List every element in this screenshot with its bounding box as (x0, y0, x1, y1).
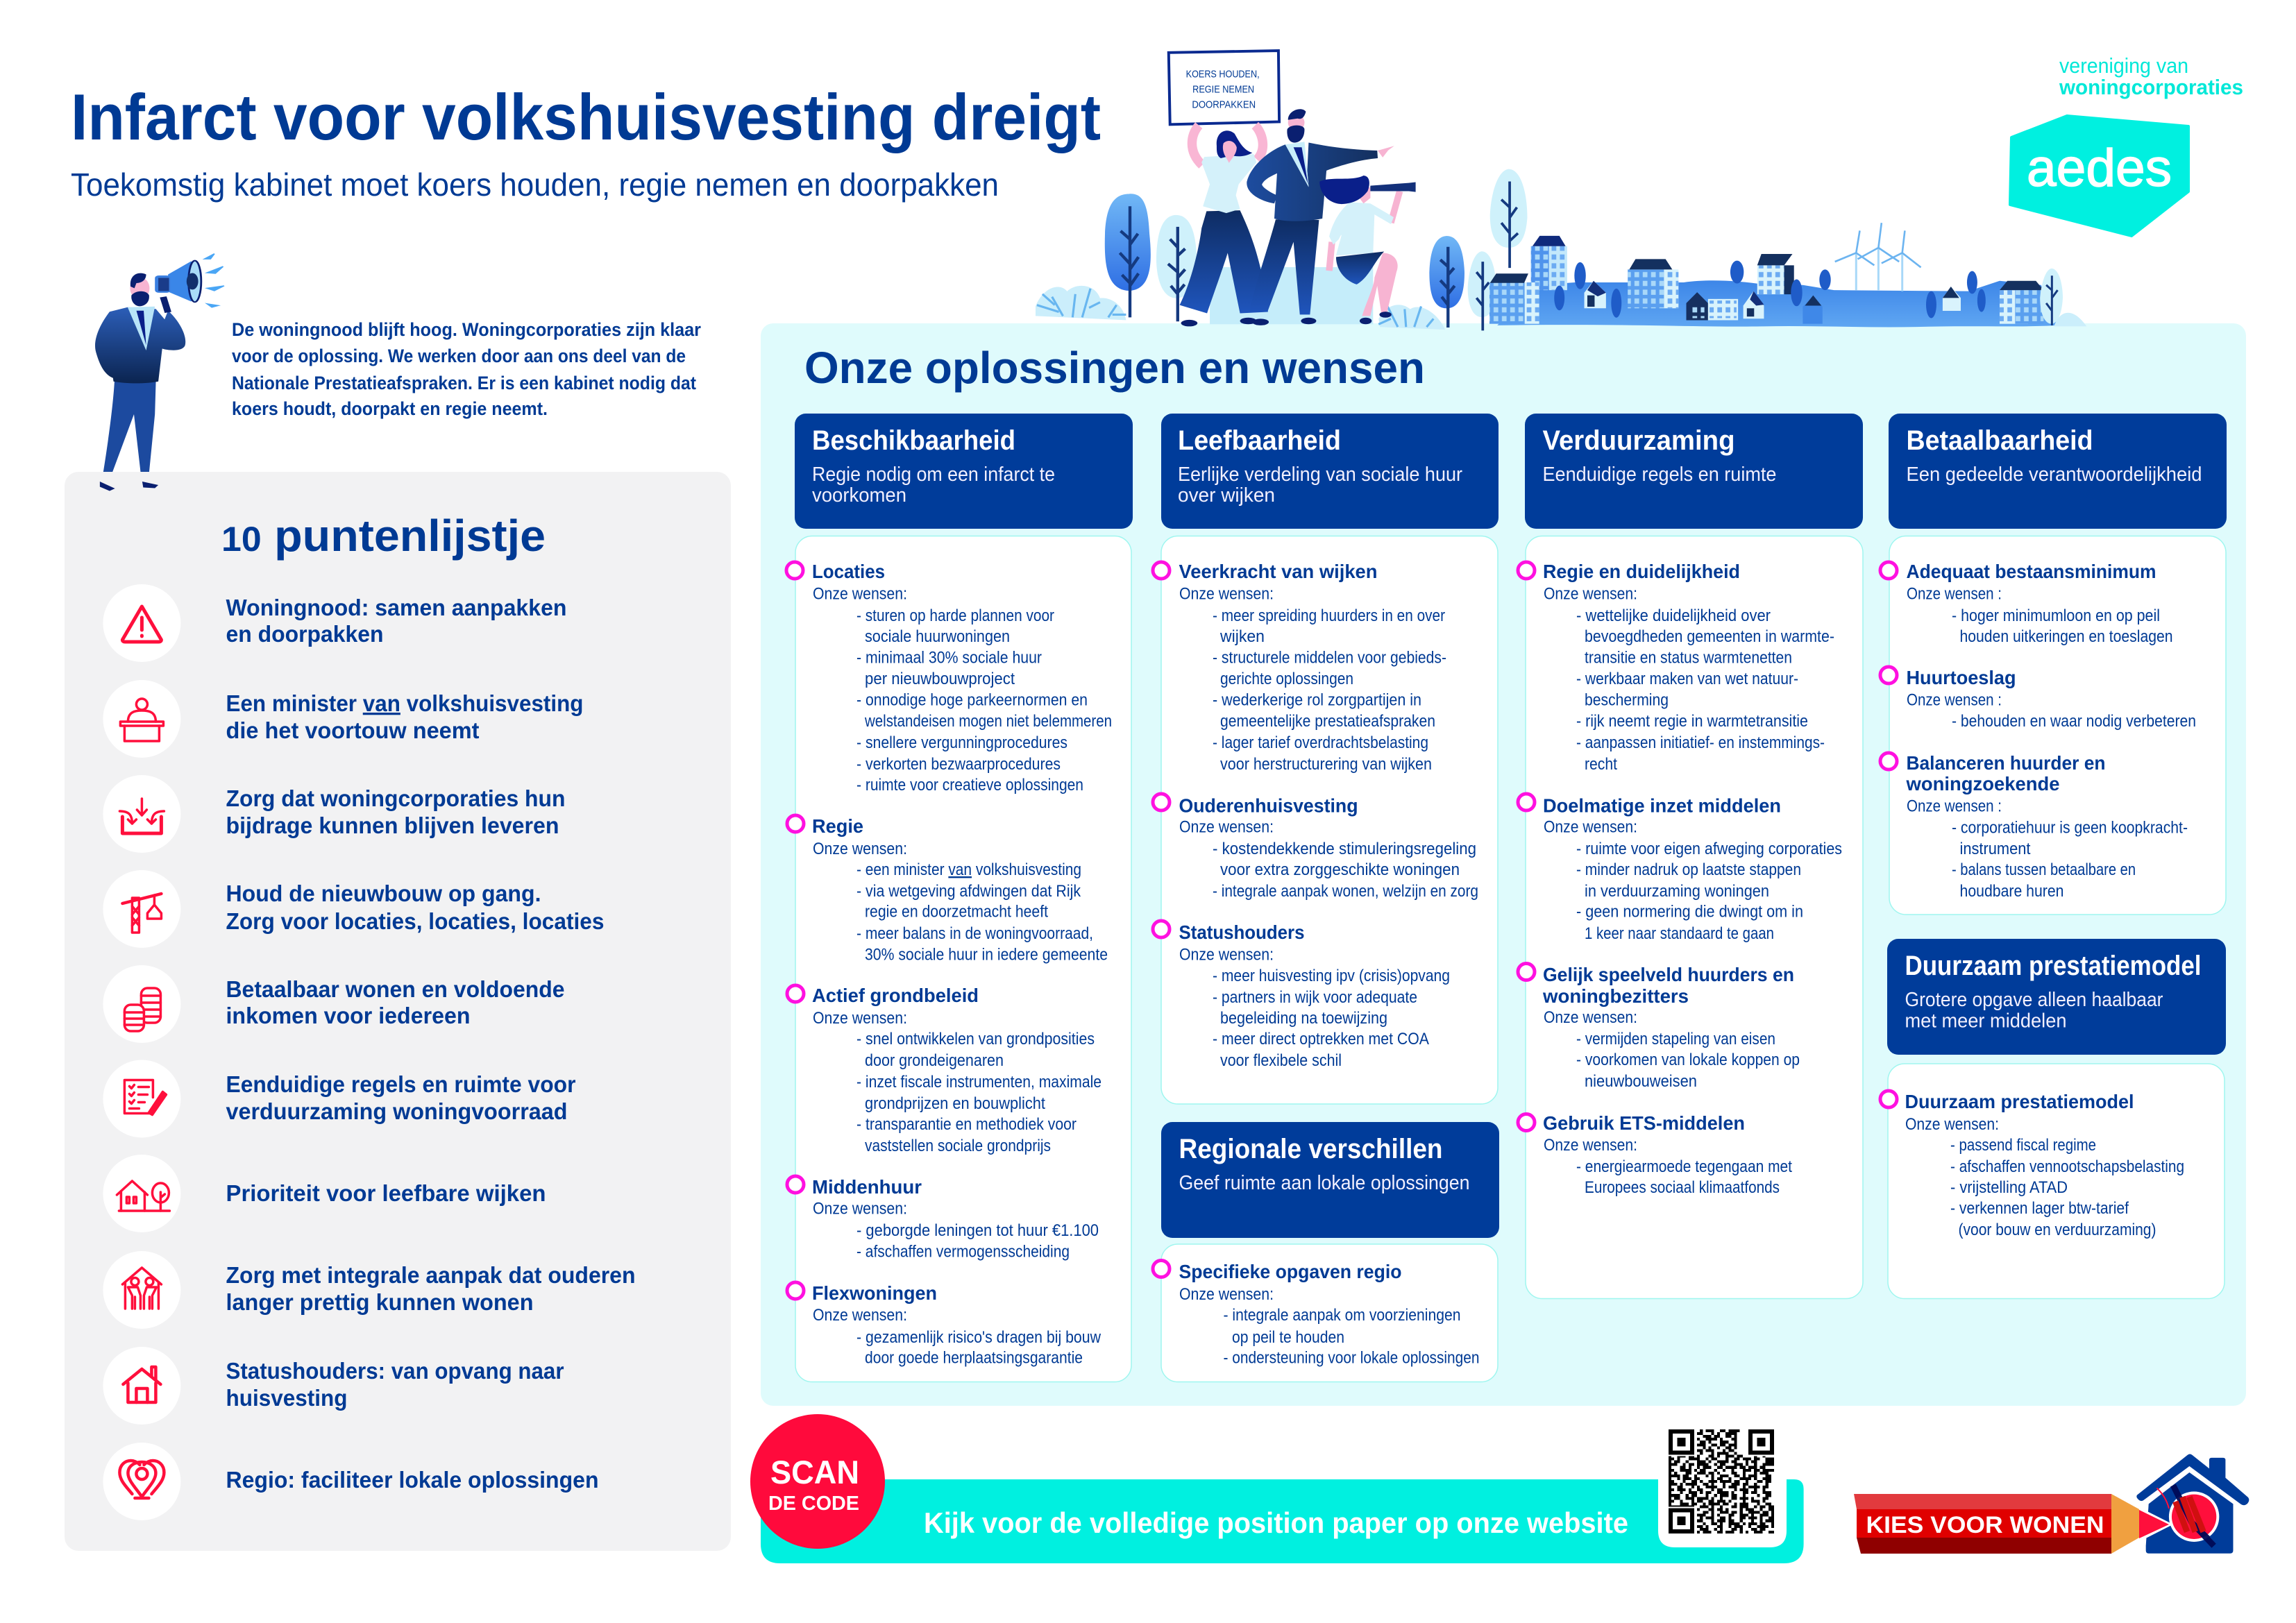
item 9: statushouders: Statushouders: van opvang naar (226, 1358, 564, 1384)
item: Veerkracht van wijken: gerichte oplossingen (1220, 670, 1353, 688)
header: Beschikbaarheid: Beschikbaarheid (812, 425, 1015, 456)
item: Statushouders: begeleiding na toewijzing (1220, 1009, 1387, 1028)
item 1: woningnood (103, 584, 566, 662)
item: Balanceren huurder en woningzoekende (1880, 752, 2188, 901)
item: Huurtoeslag: Huurtoeslag (1906, 667, 2016, 688)
item: Veerkracht van wijken: voor herstructurering van wijken (1220, 755, 1432, 774)
item: Huurtoeslag: Onze wensen : (1907, 691, 2002, 709)
item: Doelmatige inzet middelen (1518, 794, 1842, 943)
item 3: bijdrage: bijdrage kunnen blijven leveren (226, 813, 559, 838)
item: Adequaat bestaansminimum: - hoger minimumloon en op peil (1952, 606, 2160, 625)
item: Veerkracht van wijken: wijken (1219, 627, 1265, 646)
card: Betaalbaarheid items (1889, 536, 2226, 915)
item: Regie: regie en doorzetmacht heeft (865, 902, 1048, 921)
logo: kies voor wonen pencil and house (1854, 1454, 2249, 1556)
sign (1169, 51, 1279, 124)
badge: scan de code: DE CODE (768, 1493, 859, 1515)
item: Regie en duidelijkheid: Regie en duidelijkheid (1543, 561, 1740, 582)
item: Statushouders: - partners in wijk voor adequate (1213, 988, 1417, 1007)
item 4: nieuwbouw: Houd de nieuwbouw op gang. (226, 881, 541, 906)
item: Ouderenhuisvesting (1153, 794, 1478, 901)
header: Duurzaam prestatiemodel (1887, 939, 2226, 1055)
subtitle: Toekomstig kabinet moet koers houden, regie nemen en doorpakken (71, 167, 999, 203)
logo: Aedes vereniging van woningcorporaties: aedes (2027, 139, 2172, 198)
header: Regionale verschillen (1161, 1122, 1499, 1238)
item: Balanceren huurder en woningzoekende: instrument (1960, 840, 2031, 858)
item: Locaties: - onnodige hoge parkeernormen en (856, 691, 1088, 709)
item: Specifieke opgaven regio (1153, 1260, 1480, 1367)
item: Regie: 30% sociale huur in iedere gemeente (865, 945, 1108, 965)
item: Duurzaam prestatiemodel: - afschaffen vennootschapsbelasting (1950, 1157, 2184, 1176)
small trees (1554, 261, 1986, 318)
item: Doelmatige inzet middelen: 1 keer naar standaard te gaan (1585, 924, 1774, 943)
item: Veerkracht van wijken: - wederkerige rol zorgpartijen in (1213, 691, 1421, 709)
item: Gelijk speelveld: nieuwbouweisen (1585, 1072, 1697, 1091)
card: prestatiemodel item (1888, 1064, 2225, 1299)
item: Gebruik ETS-middelen: - energiearmoede tegengaan met (1576, 1157, 1792, 1176)
item: Middenhuur: Middenhuur (812, 1176, 922, 1198)
item: Veerkracht van wijken (1153, 561, 1446, 774)
header: Betaalbaarheid: Een gedeelde verantwoordelijkheid (1906, 464, 2202, 486)
item: Duurzaam prestatiemodel: Onze wensen: (1905, 1115, 1999, 1134)
item 8: ouderen: Zorg met integrale aanpak dat ouderen (226, 1262, 636, 1288)
man pointing (1249, 219, 1319, 314)
item: Regie en duidelijkheid: transitie en status warmtenetten (1585, 648, 1792, 668)
header: Verduurzaming: Verduurzaming (1542, 425, 1735, 456)
item: Regie en duidelijkheid (1518, 561, 1834, 774)
item: Huurtoeslag (1880, 667, 2196, 731)
illustration: people with sign and trees: KOERS HOUDEN, (1186, 68, 1260, 80)
item: Middenhuur: - afschaffen vermogensscheiding (856, 1242, 1070, 1261)
banner: scan the code (750, 1414, 1804, 1563)
item: Regie: - meer balans in de woningvoorraad, (856, 924, 1093, 943)
header: Verduurzaming: Eenduidige regels en ruimte (1542, 464, 1777, 486)
item: Specifieke opgaven regio: op peil te houden (1232, 1328, 1344, 1347)
item: Gebruik ETS-middelen: Gebruik ETS-middelen (1543, 1112, 1745, 1134)
ground (1497, 280, 2058, 328)
title: Infarct voor volkshuisvesting dreigt (71, 80, 1101, 153)
item: Balanceren huurder en woningzoekende: Balanceren huurder en (1906, 752, 2106, 774)
item 2: minister (103, 680, 583, 758)
buildings (1531, 246, 1549, 290)
item: Huurtoeslag: - behouden en waar nodig verbeteren (1952, 712, 2196, 731)
item 7: leefbare wijken: Prioriteit voor leefbare wijken (226, 1180, 546, 1206)
item: Statushouders: Onze wensen: (1179, 945, 1274, 965)
item: Adequaat bestaansminimum: Onze wensen : (1907, 584, 2002, 604)
item: Flexwoningen (787, 1282, 1101, 1367)
house (2111, 1454, 2249, 1556)
header: Duurzaam prestatiemodel: met meer middelen (1905, 1010, 2067, 1033)
logo: Aedes vereniging van woningcorporaties (2010, 53, 2243, 236)
intro text: Nationale Prestatieafspraken. Er is een kabinet nodig dat (232, 373, 696, 393)
column: Leefbaarheid (1153, 414, 1499, 1382)
wind turbines (1835, 223, 1921, 291)
item: Statushouders: - meer direct optrekken met COA (1213, 1030, 1429, 1048)
item: Specifieke opgaven regio: Onze wensen: (1179, 1285, 1274, 1304)
illustration: man with megaphone (95, 254, 224, 480)
item: Middenhuur: Onze wensen: (813, 1199, 907, 1218)
column: Beschikbaarheid (786, 414, 1133, 1382)
item 2: minister: die het voortouw neemt (226, 717, 479, 743)
item 6: regels: verduurzaming woningvoorraad (226, 1098, 568, 1124)
item: Adequaat bestaansminimum: Adequaat bestaansminimum (1906, 561, 2156, 582)
item 9: statushouders: huisvesting (226, 1385, 347, 1411)
item: Ouderenhuisvesting: - kostendekkende stimuleringsregeling (1213, 840, 1476, 858)
item: Locaties: - ruimte voor creatieve oplossingen (856, 776, 1083, 794)
item: Doelmatige inzet middelen: - minder nadruk op laatste stappen (1576, 860, 1801, 879)
item: Veerkracht van wijken: Onze wensen: (1179, 584, 1274, 604)
intro text: koers houdt, doorpakt en regie neemt. (232, 398, 548, 419)
item: Gelijk speelveld: woningbezitters (1542, 985, 1689, 1007)
item 3: bijdrage (103, 775, 565, 853)
item: Doelmatige inzet middelen: Onze wensen: (1544, 817, 1637, 837)
item: Flexwoningen: - gezamenlijk risico's dragen bij bouw (856, 1328, 1101, 1347)
item: Gebruik ETS-middelen: Europees sociaal klimaatfonds (1585, 1178, 1780, 1197)
heading: 10 puntenlijstje (221, 511, 546, 561)
item 9: statushouders (103, 1347, 564, 1425)
item: Balanceren huurder en woningzoekende: houdbare huren (1960, 882, 2064, 901)
intro text (232, 319, 701, 419)
item 3: bijdrage: Zorg dat woningcorporaties hun (226, 785, 565, 811)
item 1: woningnood: Woningnood: samen aanpakken (226, 595, 566, 620)
item: Regie en duidelijkheid: - werkbaar maken van wet natuur- (1576, 670, 1798, 688)
item 8: ouderen (103, 1251, 635, 1329)
item: Locaties: - verkorten bezwaarprocedures (856, 755, 1061, 774)
item: Regie: - een minister van volkshuisvesting (856, 860, 1081, 879)
item: Regie (787, 815, 1108, 965)
heading: onze oplossingen en wensen: Onze oplossingen en wensen (804, 343, 1425, 393)
item: Duurzaam prestatiemodel (1880, 1091, 2184, 1239)
header: Leefbaarheid (1161, 414, 1499, 529)
panel: 10 puntenlijstje (65, 472, 731, 1551)
item: Regie en duidelijkheid: recht (1585, 755, 1617, 774)
intro text: De woningnood blijft hoog. Woningcorporaties zijn klaar (232, 319, 701, 340)
item: Regie en duidelijkheid: - aanpassen initiatief- en instemmings- (1576, 733, 1825, 752)
card: Verduurzaming items (1526, 536, 1863, 1299)
item: Veerkracht van wijken: Veerkracht van wijken (1179, 561, 1377, 582)
item: Regie en duidelijkheid: Onze wensen: (1544, 584, 1637, 604)
item: Statushouders: Statushouders (1179, 921, 1305, 943)
item: Locaties: Locaties (812, 561, 885, 582)
item: Specifieke opgaven regio: - ondersteuning voor lokale oplossingen (1223, 1349, 1480, 1367)
item: Locaties: Onze wensen: (813, 584, 907, 604)
item: Actief grondbeleid: - transparantie en methodiek voor (856, 1115, 1077, 1134)
card: regio item (1161, 1244, 1498, 1382)
woman with telescope (1329, 191, 1400, 271)
illustration: town with wind turbines (1468, 169, 2086, 330)
item: Flexwoningen: Onze wensen: (813, 1306, 907, 1325)
item: Specifieke opgaven regio: - integrale aanpak om voorzieningen (1223, 1306, 1460, 1325)
pencil: KIES VOOR WONEN (1866, 1512, 2104, 1538)
item: Gelijk speelveld: - voorkomen van lokale koppen op (1576, 1051, 1800, 1069)
header: Betaalbaarheid: Betaalbaarheid (1906, 425, 2093, 456)
item: Balanceren huurder en woningzoekende: - balans tussen betaalbare en (1952, 860, 2136, 879)
item 2: minister: Een minister van volkshuisvesting (226, 690, 583, 716)
item 10: regio (103, 1443, 598, 1520)
item: Duurzaam prestatiemodel: - vrijstelling ATAD (1950, 1178, 2068, 1197)
column: Verduurzaming (1518, 414, 1863, 1299)
item: Actief grondbeleid: - snel ontwikkelen van grondposities (856, 1030, 1095, 1048)
illustration: people with sign and trees: REGIE NEMEN (1192, 84, 1254, 96)
item: Regie en duidelijkheid: - wettelijke duidelijkheid over (1576, 606, 1771, 625)
item 5: betaalbaar: Betaalbaar wonen en voldoende (226, 976, 565, 1002)
item: Regie en duidelijkheid: - rijk neemt regie in warmtetransitie (1576, 712, 1808, 731)
item: Balanceren huurder en woningzoekende: woningzoekende (1906, 773, 2060, 794)
item: Locaties: - minimaal 30% sociale huur (856, 648, 1042, 668)
item: Adequaat bestaansminimum: houden uitkeringen en toeslagen (1960, 627, 2172, 646)
item: Locaties: - snellere vergunningprocedures (856, 733, 1067, 752)
item: Regie: Regie (812, 815, 863, 837)
item 5: betaalbaar: inkomen voor iedereen (226, 1003, 471, 1028)
item: Actief grondbeleid: Onze wensen: (813, 1009, 907, 1028)
item: Balanceren huurder en woningzoekende: - corporatiehuur is geen koopkracht- (1952, 819, 2188, 837)
banner text: Kijk voor de volledige position paper op onze website (924, 1506, 1628, 1539)
item: Actief grondbeleid (787, 985, 1101, 1155)
item: Gelijk speelveld (1518, 963, 1800, 1091)
item: Locaties: - sturen op harde plannen voor (856, 606, 1054, 625)
header: Beschikbaarheid (795, 414, 1133, 529)
QR code box (1658, 1424, 1787, 1547)
restore figure shoes over the panel (100, 482, 158, 491)
item: Ouderenhuisvesting: Onze wensen: (1179, 817, 1274, 837)
item: Doelmatige inzet middelen: in verduurzaming woningen (1585, 882, 1769, 901)
item: Duurzaam prestatiemodel: - passend fiscal regime (1950, 1136, 2096, 1155)
header: Regionale verschillen: Geef ruimte aan lokale oplossingen (1179, 1172, 1470, 1194)
item: Doelmatige inzet middelen: Doelmatige inzet middelen (1543, 795, 1781, 816)
item: Middenhuur: - geborgde leningen tot huur €1.100 (856, 1221, 1099, 1240)
item: Actief grondbeleid: grondprijzen en bouwplicht (865, 1094, 1045, 1113)
item: Actief grondbeleid: - inzet fiscale instrumenten, maximale (856, 1073, 1101, 1091)
header: Duurzaam prestatiemodel: Duurzaam prestatiemodel (1905, 951, 2202, 981)
item: Gebruik ETS-middelen: Onze wensen: (1544, 1136, 1637, 1155)
header: Leefbaarheid: over wijken (1178, 484, 1275, 507)
item: Locaties: per nieuwbouwproject (865, 670, 1015, 688)
item: Ouderenhuisvesting: - integrale aanpak wonen, welzijn en zorg (1213, 882, 1478, 901)
item: Duurzaam prestatiemodel: Duurzaam prestatiemodel (1905, 1091, 2134, 1112)
item: Flexwoningen: Flexwoningen (812, 1282, 937, 1304)
item: Veerkracht van wijken: - meer spreiding huurders in en over (1213, 606, 1445, 625)
header: Leefbaarheid: Eerlijke verdeling van sociale huur (1178, 464, 1462, 486)
panel: solutions background (761, 323, 2246, 1406)
item: Actief grondbeleid: Actief grondbeleid (812, 985, 979, 1006)
woman with sign (1192, 126, 1263, 165)
item: Regie: - via wetgeving afdwingen dat Rijk (856, 882, 1081, 901)
card: Beschikbaarheid items (795, 536, 1131, 1382)
item: Ouderenhuisvesting: Ouderenhuisvesting (1179, 795, 1358, 816)
item 4: nieuwbouw: Zorg voor locaties, locaties, locaties (226, 908, 604, 934)
item: Doelmatige inzet middelen: - geen normering die dwingt om in (1576, 902, 1803, 921)
item: Balanceren huurder en woningzoekende: Onze wensen : (1907, 797, 2002, 816)
item: Duurzaam prestatiemodel: - verkennen lager btw-tarief (1950, 1199, 2129, 1218)
item: Locaties: sociale huurwoningen (865, 627, 1010, 646)
badge: scan de code (750, 1414, 885, 1549)
item: Doelmatige inzet middelen: - ruimte voor eigen afweging corporaties (1576, 840, 1842, 858)
item: Locaties (786, 561, 1112, 794)
item: Locaties: welstandeisen mogen niet belemmeren (864, 712, 1112, 731)
item: Gelijk speelveld: Gelijk speelveld huurders en (1543, 964, 1794, 985)
item: Middenhuur (787, 1176, 1099, 1261)
column: Betaalbaarheid (1880, 414, 2227, 1299)
item: Actief grondbeleid: door grondeigenaren (865, 1051, 1004, 1070)
item: Gebruik ETS-middelen (1518, 1112, 1792, 1197)
item: Veerkracht van wijken: - lager tarief overdrachtsbelasting (1213, 733, 1428, 752)
item: Gelijk speelveld: Onze wensen: (1544, 1008, 1637, 1027)
item: Statushouders (1153, 921, 1450, 1070)
item: Flexwoningen: door goede herplaatsingsgarantie (865, 1349, 1083, 1367)
item: Duurzaam prestatiemodel: (voor bouw en verduurzaming) (1959, 1221, 2156, 1239)
header: Leefbaarheid: Leefbaarheid (1178, 425, 1341, 456)
item 8: ouderen: langer prettig kunnen wonen (226, 1289, 533, 1315)
item: Ouderenhuisvesting: voor extra zorggeschikte woningen (1220, 860, 1460, 879)
card: Leefbaarheid items (1161, 536, 1498, 1104)
item 7: leefbare wijken (103, 1155, 546, 1232)
intro text: voor de oplossing. We werken door aan ons deel van de (232, 346, 686, 366)
item 6: regels: Eenduidige regels en ruimte voor (226, 1071, 576, 1097)
item: Regie: Onze wensen: (813, 840, 907, 858)
logo: Aedes vereniging van woningcorporaties: woningcorporaties (2059, 75, 2243, 99)
item 10: regio: Regio: faciliteer lokale oplossingen (226, 1467, 598, 1493)
illustration: people with sign and trees (1036, 51, 1464, 330)
item 4: nieuwbouw (103, 870, 604, 948)
item: Veerkracht van wijken: - structurele middelen voor gebieds- (1213, 648, 1446, 668)
item: Adequaat bestaansminimum (1880, 561, 2172, 646)
item 6: regels (103, 1060, 576, 1138)
item: Specifieke opgaven regio: Specifieke opgaven regio (1179, 1261, 1402, 1282)
item: Statushouders: - meer huisvesting ipv (crisis)opvang (1213, 967, 1450, 985)
header: Betaalbaarheid (1889, 414, 2227, 529)
header: Beschikbaarheid: voorkomen (812, 484, 906, 507)
header: Beschikbaarheid: Regie nodig om een infarct te (812, 464, 1055, 486)
item: Regie en duidelijkheid: bescherming (1585, 691, 1669, 709)
item 5: betaalbaar (103, 965, 564, 1043)
header: Duurzaam prestatiemodel: Grotere opgave alleen haalbaar (1905, 989, 2163, 1011)
item: Veerkracht van wijken: gemeentelijke prestatieafspraken (1220, 712, 1435, 731)
pencil (1854, 1494, 2169, 1554)
header: Regionale verschillen: Regionale verschillen (1179, 1134, 1442, 1164)
item: Actief grondbeleid: vaststellen sociale grondprijs (865, 1137, 1051, 1155)
header: Verduurzaming (1525, 414, 1863, 529)
item: Regie en duidelijkheid: bevoegdheden gemeenten in warmte- (1585, 627, 1834, 646)
logo: Aedes vereniging van woningcorporaties: vereniging van (2059, 53, 2188, 78)
illustration: people with sign and trees: DOORPAKKEN (1192, 99, 1256, 110)
item: Gelijk speelveld: - vermijden stapeling van eisen (1576, 1030, 1775, 1048)
item: Statushouders: voor flexibele schil (1220, 1051, 1342, 1070)
item 1: woningnood: en doorpakken (226, 621, 383, 647)
badge: scan de code: SCAN (770, 1454, 859, 1490)
